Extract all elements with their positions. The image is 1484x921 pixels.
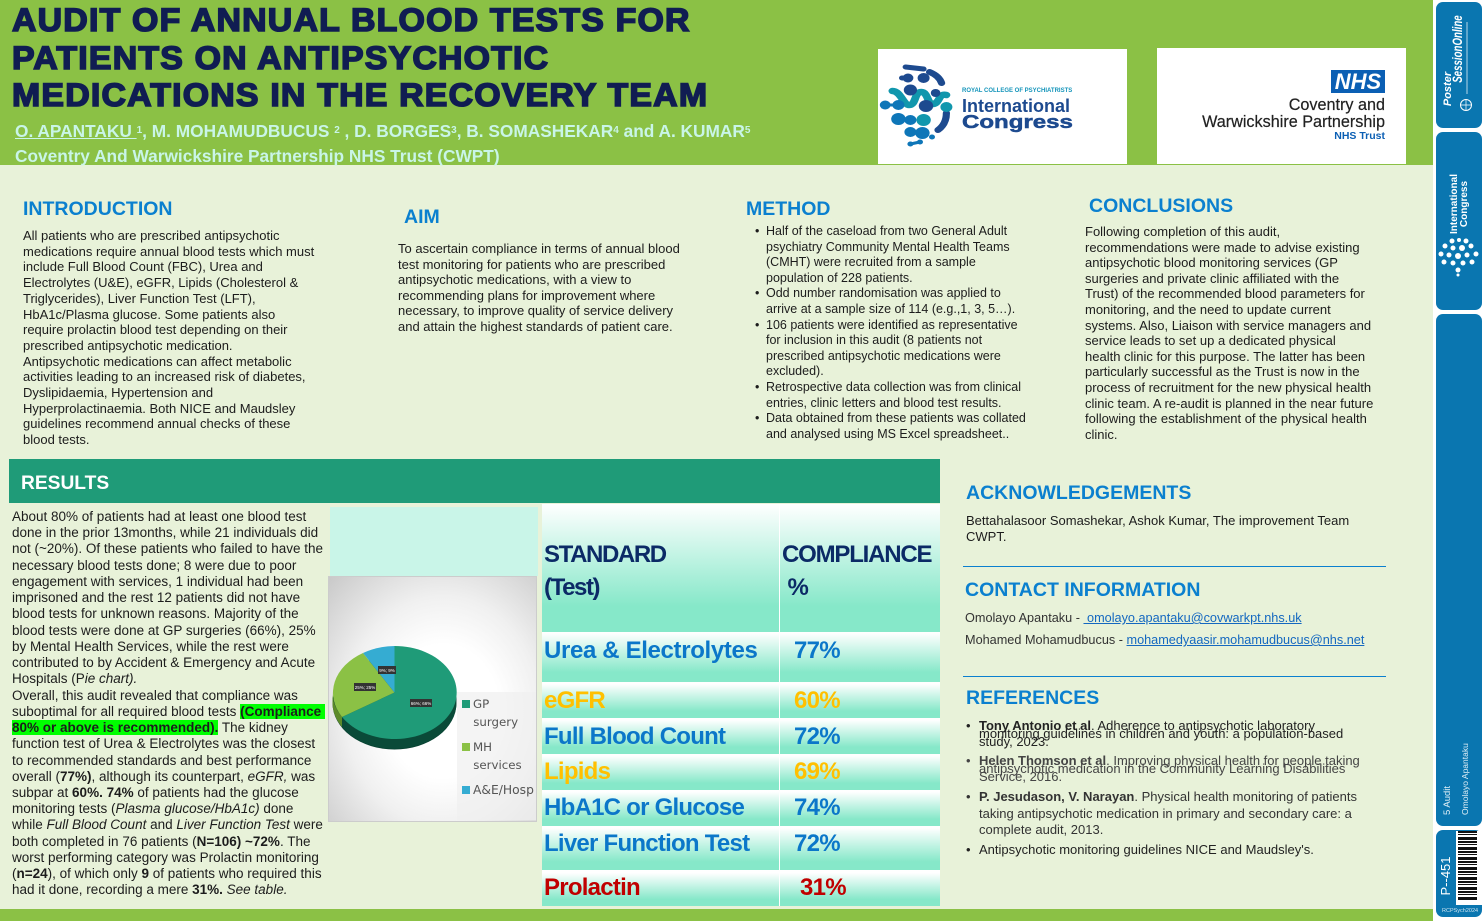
heading: introduction: INTRODUCTION [23,198,172,220]
reference 3: • [966,789,971,804]
row: prolactin [542,873,940,906]
row: full blood count: 72% [794,723,840,750]
barcode [1456,831,1482,905]
title: AUDIT OF ANNUAL BLOOD TESTS FOR PATIENTS ON ANTIPSYCHOTIC MEDICATIONS IN THE RECOVERY TEAM [12,2,708,113]
results heading bar: RESULTS [21,473,109,494]
compliance table [542,504,940,906]
row: full blood count: Full Blood Count [544,723,725,750]
NHS Trust: NHS Trust [1334,130,1385,142]
pie chart: 25%; 25% [355,685,375,690]
legend: MH services: MH services [462,740,522,772]
footer band [0,909,1433,921]
sidebar tab: presenter [1436,314,1482,826]
text: aim: To ascertain compliance in terms of annual blood test monitoring for patients who are prescribed antipsychotic medications, with a view to recommending plans for improvement where necessary, to improve quality of service delivery and attain the highest standards of patient care. [398,241,680,334]
reference 1: • [966,718,971,733]
row: lipids: Lipids [544,758,610,785]
text: results: About 80% of patients had at least one blood test done in the prior 13months, while 21 individuals did not (~20%). Of these patients who failed to have the necessary blood tests done; 8 were due to poor engagement with services, 1 individual had been imprisoned and the rest 12 patients did not have blood tests for unknown reasons. Majority of the blood tests were done at GP surgeries (66%), 25% by Mental Health Services, while the rest were contributed to by Accident & Emergency and Acute Hospitals (Pie chart). Overall, this audit revealed that compliance was suboptimal for all required blood tests (Compliance 80% or above is recommended). The kidney function test of Urea & Electrolytes was the closest to recommended standards and best performance overall (77%), although its counterpart, eGFR, was subpar at 60%. 74% of patients had the glucose monitoring tests (Plasma glucose/HbA1c) done while Full Blood Count and Liver Function Test were both completed in 76 patients (N=106) ~72%. The worst performing category was Prolactin monitoring (n=24), of which only 9 of patients who required this had it done, recording a mere 31%. See table. [12,509,323,897]
text: method: • [755,318,759,332]
poster number: P--451 [1438,856,1453,896]
sidebar caption: RCPSych2024 [1442,908,1478,914]
row: HbA1C or glucose: HbA1C or Glucose [544,794,744,821]
row: lipids [542,756,940,790]
row: prolactin: 31% [800,874,846,901]
row: liver function test: 72% [794,830,840,857]
header row: STANDARD (Test) [544,541,666,601]
sidebar text: 5 Audit: 5 Audit [1442,786,1453,815]
text: method: • [755,411,759,425]
table column divider [779,504,780,906]
text: conclusions: Following completion of this audit, recommendations were made to advise existing antipsychotic blood monitoring services (GP surgeries and private clinic affiliated with the Trust) of the recommended blood parameters for monitoring, and the need to update current systems. Also, Liaison with service managers and service leads to set up a dedicated physical health clinic for this purpose. The latter has been particularly successful as the Trust is now in the process of recruitment for the new physical health clinic team. A re-audit is planned in the near future following the establishment of the physical health clinic. [1085,224,1373,442]
text: acknowledgements: Bettahalasoor Somashekar, Ashok Kumar, The improvement Team CWPT. [966,513,1349,544]
row: urea and electrolytes: Urea & Electrolytes [544,637,757,664]
results heading bar [9,459,940,503]
pie chart: 9%; 9% [379,668,395,673]
header row: COMPLIANCE % [782,541,931,601]
pie chart [332,646,457,750]
legend: GP surgery: GP surgery [462,697,518,729]
sidebar text: Poster: Poster [1442,72,1454,106]
heading: method: METHOD [746,198,830,220]
legend [457,692,536,820]
reference 2: • [966,753,971,768]
mint panel above chart [330,507,538,576]
header row [542,504,940,632]
logo: NHS Coventry and Warwickshire [1157,48,1406,164]
heading: references: REFERENCES [966,687,1099,709]
text: method: • [755,224,759,238]
text: method: • [755,286,759,300]
row: prolactin: Prolactin [544,874,640,901]
reference 2: Helen Thomson et al. Improving physical health for people taking antipsychotic medication in the Community Learning Disabilities Service, 2016. [979,753,1360,784]
icon: NHS lozenge: NHS [1335,69,1381,94]
authors: O. APANTAKU 1, M. MOHAMUDBUCUS 2 , D. BORGES3, B. SOMASHEKAR4 and A. KUMAR5 [15,121,750,141]
logo: International Congress [878,49,1127,164]
row: liver function test [542,828,940,870]
trust name: Coventry and Warwickshire Partnership [1202,96,1385,130]
text: introduction: All patients who are prescribed antipsychotic medications require annual blood tests which must include Full Blood Count (FBC), Urea and Electrolytes (U&E), eGFR, Lipids (Cholesterol & Triglycerides), Liver Function Test (LFT), HbA1c/Plasma glucose. Some patients also require prolactin blood test depending on their prescribed antipsychotic medication. Antipsychotic medications can affect metabolic activities leading to an increased risk of diabetes, Dyslipidaemia, Hypertension and Hyperprolactinaemia. Both NICE and Maudsley guidelines recommend annual checks of these blood tests. [23,228,314,447]
sidebar text: Omolayo Apantaku: Omolayo Apantaku [1460,743,1470,815]
icon: brain dots [880,64,952,146]
pie chart: 66%; 66% [411,701,431,706]
reference 4: Antipsychotic monitoring guidelines NICE and Maudsley's. [979,842,1314,857]
heading: aim: AIM [404,206,440,228]
text: contact details: Omolayo Apantaku - omolayo.apantaku@covwarkpt.nhs.uk Mohamed Mohamudbucus - mohamedyaasir.mohamudbucus@nhs.net [965,611,1364,647]
pie chart panel [328,576,537,822]
sidebar globe icon [1460,22,1472,111]
reference 1: Tony Antonio et al. Adherence to antipsychotic laboratory monitoring guidelines in children and youth: a population-based study, 2023. [979,718,1343,749]
row: urea and electrolytes [542,633,940,682]
reference 4: • [966,842,971,857]
sidebar text: SessionOnline: SessionOnline [1450,15,1465,83]
heading: acknowledgements: ACKNOWLEDGEMENTS [966,482,1191,504]
reference list [966,718,1360,857]
row: eGFR: eGFR [544,687,605,714]
header band [0,0,1433,165]
logo text: Royal College: ROYAL COLLEGE OF PSYCHIATRISTS [962,88,1072,94]
row: HbA1C or glucose: 74% [794,794,840,821]
affiliation: Coventry And Warwickshire Partnership NHS Trust (CWPT) [15,146,500,166]
heading: conclusions: CONCLUSIONS [1089,195,1233,217]
sidebar tab: poster number [1436,830,1482,917]
text: method: Half of the caseload from two General Adult psychiatry Community Mental Health Teams (CMHT) were recruited from a sample population of 228 patients. Odd number randomisation was applied to arrive at a sample size of 114 (e.g.,1, 3, 5…). 106 patients were identified as representative for inclusion in this audit (8 patients not prescribed antipsychotic medications were excluded). Retrospective data collection was from clinical entries, clinic letters and blood test results. Data obtained from these patients was collated and analysed using MS Excel spreadsheet.. [766,224,1026,441]
row: eGFR [542,684,940,718]
text: method: • [755,380,759,394]
sidebar tab: Poster Session Online [1436,2,1482,128]
row: urea and electrolytes: 77% [794,637,840,664]
row: HbA1C or glucose [542,792,940,826]
reference 3: P. Jesudason, V. Narayan. Physical health monitoring of patients taking antipsychotic medication in primary and secondary care: a complete audit, 2013. [979,789,1357,837]
logo text: Congress: Congress [962,111,1073,132]
heading: contact information: CONTACT INFORMATION [965,579,1200,601]
sidebar brain icon [1438,238,1478,276]
row: full blood count [542,720,940,754]
sidebar tab: International Congress [1436,132,1482,310]
sidebar logo text: International Congress [1449,174,1470,234]
row: eGFR: 60% [794,687,840,714]
row: lipids: 69% [794,758,840,785]
logo text: International: International [962,96,1070,116]
legend: A&E/Hosp: A&E/Hosp [473,783,534,797]
row: liver function test: Liver Function Test [544,830,749,857]
